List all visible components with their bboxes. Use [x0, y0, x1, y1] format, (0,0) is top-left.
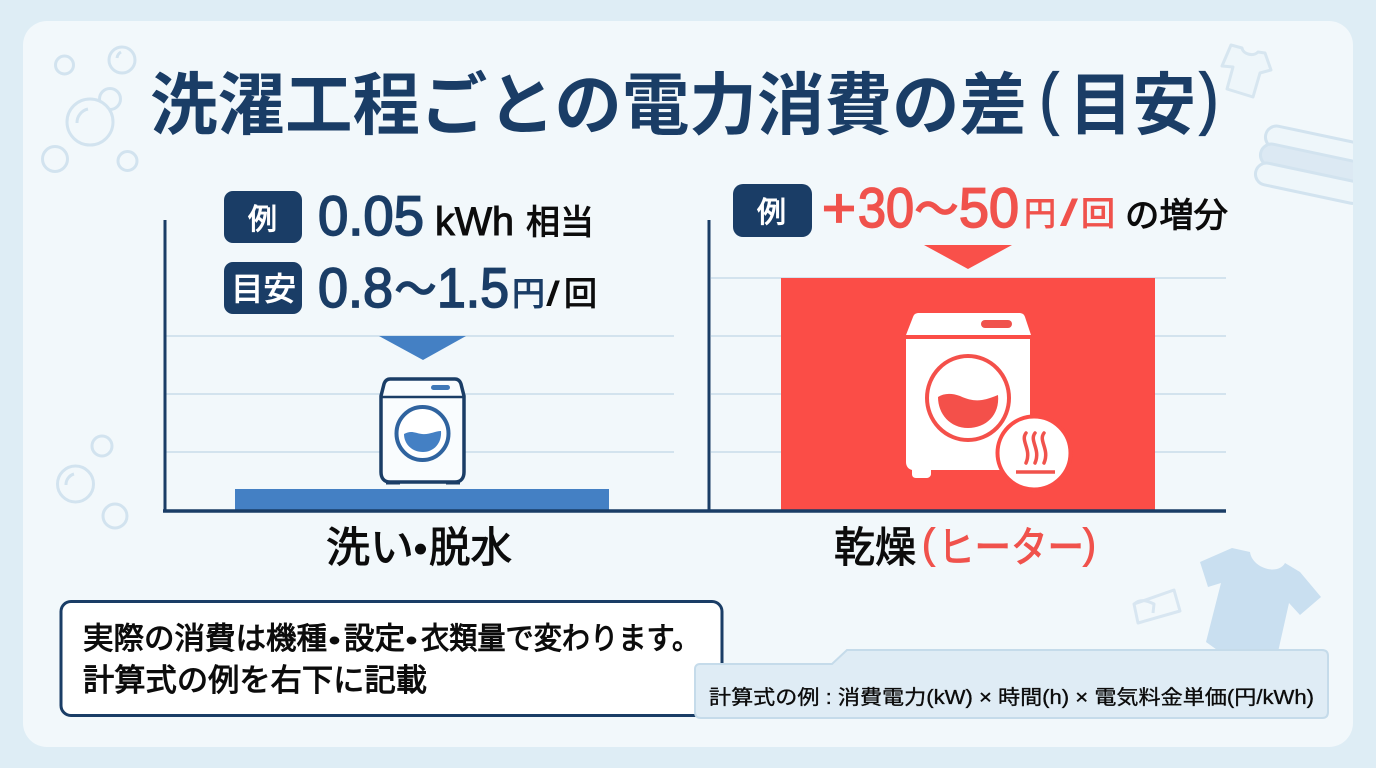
value: 0.8 to 1.5 yen per cycle: 〜	[395, 266, 436, 313]
value: plus 30 to 50 yen: 〜	[915, 186, 958, 233]
title: 目安	[1069, 68, 1196, 144]
badge: example left: 例	[248, 203, 277, 236]
value: 0.8 to 1.5 yen per cycle: 回	[564, 275, 597, 312]
callout: formula	[695, 650, 1328, 718]
label: drying with heater: )	[1083, 520, 1096, 567]
title: )	[1200, 60, 1218, 136]
bar: wash and spin	[235, 489, 609, 510]
label: wash and spin: •	[414, 528, 427, 569]
badge: estimate left: 目安	[231, 271, 296, 307]
label: wash and spin: 洗い	[326, 524, 414, 571]
value: 0.8 to 1.5 yen per cycle: 1.5	[437, 256, 509, 319]
badge: estimate left	[224, 262, 302, 314]
badge: example right: 例	[757, 196, 786, 229]
icon: bubbles top left	[42, 47, 137, 172]
callout: note: •	[329, 625, 340, 655]
icon: small shirt top right	[1222, 45, 1271, 97]
callout: note: 計算式の例を右下に記載	[83, 663, 427, 698]
icon: washing machine blue	[381, 379, 464, 483]
value: 0.05 kWh: kWh	[435, 200, 514, 244]
value: 0.8 to 1.5 yen per cycle	[318, 256, 597, 319]
badge: example left	[224, 191, 302, 243]
icon: washing machine white	[906, 313, 1070, 490]
icon: stacked towels	[1254, 124, 1353, 205]
label: drying with heater	[834, 520, 1096, 571]
badge: example right	[733, 184, 812, 237]
label: drying with heater: 乾燥	[834, 524, 916, 571]
label: wash and spin	[326, 524, 512, 571]
label: wash and spin: 脱水	[429, 524, 512, 571]
value: 0.8 to 1.5 yen per cycle: 0.8	[318, 256, 393, 319]
arrow: right marker	[924, 245, 1012, 269]
icon: small folded cloth	[1134, 590, 1180, 623]
title: 洗濯工程ごとの電力消費の差	[150, 68, 1027, 144]
icon: bubbles bottom left	[58, 436, 127, 528]
arrow: left marker	[379, 336, 466, 360]
chart: grid lines	[166, 278, 1226, 452]
callout: note: 設定	[344, 622, 405, 656]
value: 0.8 to 1.5 yen per cycle: 円	[512, 275, 545, 312]
value: plus 30 to 50 yen: 30	[858, 176, 914, 239]
value: 0.05 kWh	[318, 184, 594, 247]
callout: note: 実際の消費は機種	[83, 622, 327, 656]
value: plus 30 to 50 yen: 50	[959, 176, 1019, 239]
value: plus 30 to 50 yen: の増分	[1125, 197, 1228, 235]
bar: heater drying	[781, 278, 1155, 510]
callout: formula: 計算式の例 : 消費電力(kW) × 時間(h) × 電気料金単価(円/kWh)	[709, 686, 1314, 709]
value: 0.05 kWh: 相当	[526, 204, 594, 242]
callout: note: •	[406, 625, 417, 655]
callout: note	[61, 602, 722, 716]
title: (	[1040, 60, 1058, 136]
value: plus 30 to 50 yen: +	[822, 176, 856, 239]
label: drying with heater: ヒーター	[938, 524, 1084, 571]
callout: note: 衣類量で変わります。	[421, 622, 700, 656]
value: plus 30 to 50 yen: 回	[1081, 195, 1115, 232]
icon: large shirt bottom right	[1200, 548, 1321, 652]
value: plus 30 to 50 yen: 円	[1024, 195, 1056, 232]
value: plus 30 to 50 yen	[822, 176, 1228, 239]
label: drying with heater: (	[922, 520, 935, 567]
value: plus 30 to 50 yen: /	[1061, 192, 1077, 233]
chart axes	[163, 220, 1226, 511]
value: 0.05 kWh: 0.05	[318, 184, 424, 247]
value: 0.8 to 1.5 yen per cycle: /	[547, 275, 560, 312]
